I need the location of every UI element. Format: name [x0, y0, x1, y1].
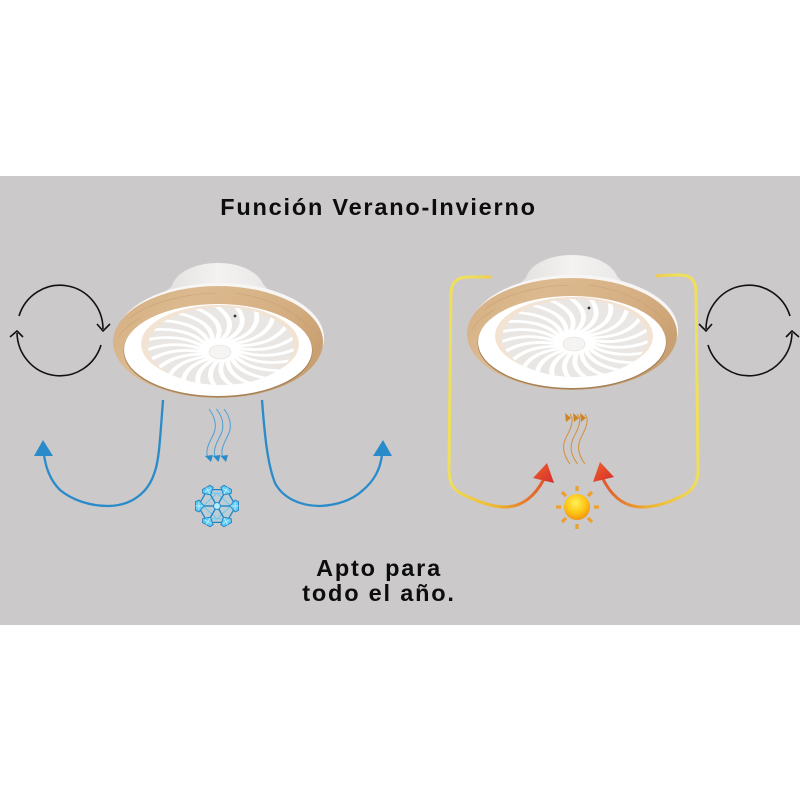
rotation arrows: right circle: [699, 285, 799, 376]
fan: winter mode: [113, 263, 324, 400]
caption: Apto para: [316, 555, 442, 581]
fan: summer mode: [467, 255, 678, 392]
blue airflow arrow: right: [262, 400, 392, 506]
cold air wavy arrows: [205, 409, 230, 462]
icon: snowflake: [196, 484, 238, 528]
rotation arrows: left circle: [10, 285, 110, 376]
warm air wavy arrows: [564, 413, 587, 464]
background band: [0, 176, 800, 625]
caption: todo el año.: [302, 580, 456, 606]
title: Función Verano-Invierno: [220, 194, 537, 220]
warm airflow arrow: right: [593, 275, 698, 507]
warm airflow arrow: left: [449, 277, 554, 507]
icon: sun: [556, 486, 599, 529]
blue airflow arrow: left: [34, 400, 163, 506]
